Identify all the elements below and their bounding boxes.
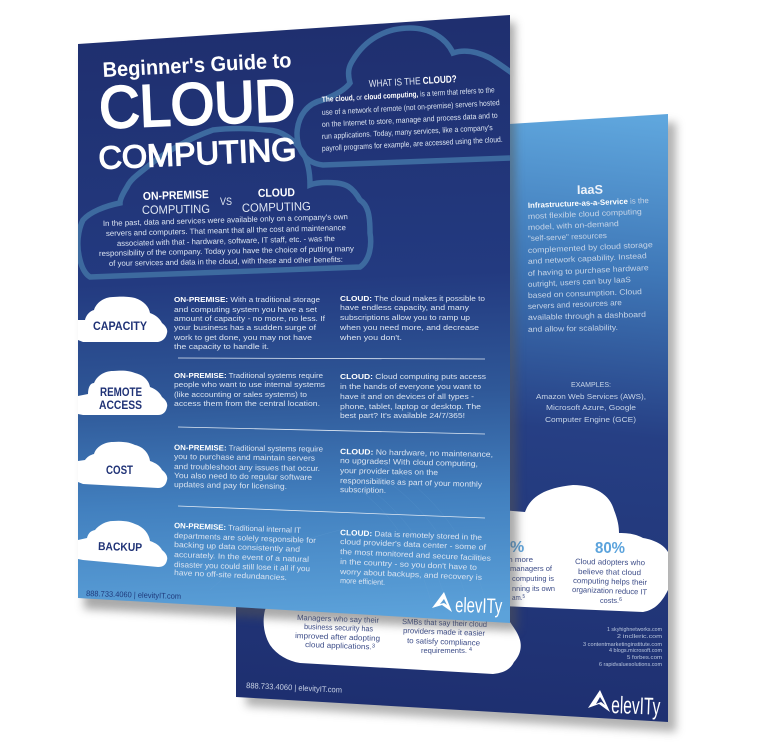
- row: remote access: [78, 371, 486, 420]
- text block: cloud definition: payroll programs for example, are accessed using the cloud.: [322, 135, 503, 153]
- on-premise text: backup: departments are solely responsible for: [174, 531, 317, 545]
- cloud text: backup: more efficient.: [340, 576, 385, 587]
- text block: examples: Microsoft Azure, Google: [546, 403, 636, 412]
- stat text: partly hidden caption: am.: [512, 593, 525, 602]
- cloud text: capacity: have endless capacity, and many: [340, 303, 469, 312]
- cloud text: backup: worry about backups, and recovery is: [339, 567, 482, 582]
- cloud text: remote access: phone, tablet, laptop or desktop. The: [340, 402, 481, 411]
- on-premise text: capacity: and computing system you have a set: [174, 305, 318, 314]
- text block: sources: 2 inclleric.com: [617, 634, 663, 640]
- title line: COMPUTING: COMPUTING: [98, 131, 297, 176]
- logo: back: elevITy: [611, 692, 661, 721]
- on-premise text: backup: have no off-site redundancies.: [174, 568, 287, 582]
- cloud text: remote access: [340, 372, 486, 420]
- stat text: compliance caption: providers made it easier: [403, 626, 486, 638]
- cloud label: backup: [78, 521, 167, 567]
- stat text: partly hidden caption: %: [510, 539, 524, 556]
- heading: on-premise vs cloud: COMPUTING: [242, 199, 311, 215]
- cloud text: capacity: [339, 294, 485, 342]
- cloud label: backup: BACKUP: [98, 541, 143, 554]
- cloud text: cost: no upgrades! With cloud computing,: [340, 456, 478, 468]
- on-premise text: capacity: ON-PREMISE: With a traditional storage: [174, 295, 320, 304]
- footer: back contact: 888.733.4060 | elevityIT.com: [246, 681, 343, 695]
- on-premise text: remote access: [174, 371, 325, 408]
- on-premise text: cost: and troubleshoot any issues that occur.: [174, 462, 320, 473]
- stat text: partly hidden caption: nning its own: [512, 584, 555, 593]
- stat text: partly hidden caption: [506, 539, 555, 602]
- text block: intro: associated with that - hardware, software, IT staff, etc. - was the: [117, 234, 335, 248]
- row: backup: [78, 521, 491, 587]
- heading: on-premise vs cloud: CLOUD: [258, 187, 295, 200]
- stat: 80%: 80%: [595, 540, 625, 557]
- cloud text: capacity: CLOUD: The cloud makes it possible to: [340, 294, 485, 303]
- cloud label: cost: [78, 442, 167, 488]
- stat text: 80% caption: computing helps their: [573, 576, 648, 587]
- on-premise text: capacity: work to get done, you may not have: [173, 333, 312, 342]
- cloud text: backup: in the country - so you don't have to: [340, 557, 477, 572]
- on-premise text: capacity: [173, 295, 326, 351]
- on-premise text: cost: ON-PREMISE: Traditional systems require: [174, 443, 323, 454]
- on-premise text: capacity: the capacity to handle it.: [174, 342, 269, 351]
- cloud text: capacity: when you need more, and decrease: [339, 323, 479, 332]
- on-premise text: backup: [174, 521, 317, 582]
- text block: IaaS description: available through a dashboard: [528, 310, 646, 322]
- text block: sources: 6 rapidvaluesolutions.com: [599, 662, 662, 668]
- stat text: security caption: [295, 613, 380, 651]
- text block: IaaS description: model, with on-demand: [528, 219, 619, 232]
- text block: IaaS description: Infrastructure-as-a-Service is the: [528, 196, 649, 210]
- on-premise text: backup: disaster you could still lose it all if you: [174, 560, 310, 573]
- stat text: partly hidden caption: managers of: [510, 564, 553, 573]
- on-premise text: capacity: your business has a sudden surge of: [174, 323, 317, 332]
- logo: front: elevITy: [455, 594, 503, 618]
- text block: cloud definition: run applications. Today, many services, like a company's: [322, 123, 493, 141]
- text block: IaaS description: and network capability. Instead: [528, 251, 647, 266]
- text block: intro: [99, 212, 354, 268]
- text block: IaaS description: and allow for scalability.: [528, 323, 618, 334]
- text block: intro: servers and computers. That meant that all the cost and maintenance: [106, 223, 346, 238]
- on-premise text: capacity: amount of capacity - no more, no less. If: [174, 314, 326, 323]
- stat text: compliance caption: 4: [469, 647, 472, 653]
- on-premise text: cost: You also need to do regular software: [174, 471, 312, 482]
- cloud text: remote access: best part? It's available 24/7/365!: [340, 411, 465, 420]
- panel: front sheet: [78, 15, 512, 623]
- text block: sources: [583, 627, 663, 668]
- on-premise text: cost: you to purchase and maintain servers: [174, 452, 315, 463]
- cloud outline: on-premise vs cloud: [78, 128, 371, 277]
- stat text: 80% caption: organization reduce IT: [572, 585, 647, 597]
- text block: IaaS description: outright, users can buy IaaS: [528, 275, 631, 289]
- stat text: partly hidden caption: computing is: [512, 574, 554, 583]
- logo: back: [588, 690, 661, 721]
- cloud label: cost: COST: [106, 465, 133, 477]
- text block: examples: EXAMPLES:: [571, 380, 611, 389]
- cloud text: cost: your provider takes on the: [340, 466, 438, 477]
- cloud label: remote access: [78, 371, 167, 415]
- on-premise text: remote access: people who want to use internal systems: [174, 380, 325, 389]
- text block: intro: of your services and data in the cloud, with these and other benefits:: [109, 255, 343, 268]
- text block: sources: 4 blogs.microsoft.com: [609, 648, 662, 654]
- text block: sources: 3 contentmarketinginstitute.com: [583, 642, 662, 648]
- stat text: security caption: Managers who say their: [297, 613, 380, 625]
- on-premise text: backup: ON-PREMISE: Traditional internal IT: [174, 521, 301, 535]
- heading: what is the cloud: WHAT IS THE CLOUD?: [369, 74, 457, 90]
- cloud label: capacity: CAPACITY: [93, 321, 147, 333]
- heading: on-premise vs cloud: VS: [220, 196, 232, 208]
- heading: on-premise vs cloud: [142, 187, 311, 217]
- footer: front contact: 888.733.4060 | elevityIT.com: [86, 589, 181, 601]
- text block: IaaS description: [528, 196, 653, 334]
- stat text: partly hidden caption: th more: [506, 555, 533, 564]
- cloud text: capacity: when you don't.: [339, 333, 402, 342]
- cloud text: cost: CLOUD: No hardware, no maintenance,: [340, 447, 493, 459]
- title line: Beginner's Guide to: Beginner's Guide to: [102, 49, 292, 82]
- stat text: compliance caption: [402, 617, 487, 655]
- text block: IaaS description: most flexible cloud computing: [528, 207, 642, 221]
- cloud text: remote access: have it and on devices of all types -: [340, 392, 474, 401]
- heading: on-premise vs cloud: COMPUTING: [142, 202, 210, 217]
- text block: intro: responsibility of the company. Today you have the choice of putting many: [99, 244, 354, 258]
- stat text: compliance caption: to satisfy compliance: [407, 636, 480, 648]
- cloud label: capacity: [78, 297, 167, 342]
- title: [98, 49, 297, 176]
- stat text: compliance caption: requirements.: [421, 646, 468, 655]
- panel: back sheet: [236, 114, 668, 722]
- text block: cloud definition: use of a network of remote (not on-premise) servers hosted: [322, 98, 500, 117]
- text block: IaaS description: based on consumption. Cloud: [528, 287, 642, 300]
- stat text: 80% caption: 6: [619, 597, 622, 603]
- on-premise text: backup: backing up data consistently and: [174, 540, 300, 554]
- heading: on-premise vs cloud: ON-PREMISE: [143, 189, 209, 203]
- cloud text: capacity: subscriptions allow you to ramp up: [340, 313, 470, 322]
- on-premise text: cost: [174, 443, 323, 491]
- back sheet shadow: [246, 122, 676, 732]
- cloud text: backup: [339, 528, 491, 587]
- cloud text: remote access: CLOUD: Cloud computing puts access: [340, 372, 486, 381]
- on-premise text: remote access: access them from the central location.: [174, 399, 320, 408]
- text block: examples: [536, 380, 646, 424]
- text block: examples: Amazon Web Services (AWS),: [536, 392, 646, 401]
- on-premise text: remote access: (like accounting or sales systems) to: [174, 390, 307, 399]
- cloud text: remote access: in the hands of everyone you want to: [340, 382, 481, 391]
- text block: sources: 5 forbes.com: [627, 655, 662, 661]
- heading: IaaS: IaaS: [577, 183, 603, 197]
- text block: IaaS description: "self-serve" resources: [528, 231, 607, 243]
- row: cost: [78, 442, 493, 495]
- cloud text: backup: cloud provider's data center - some of: [340, 537, 487, 552]
- text block: examples: Computer Engine (GCE): [545, 415, 636, 424]
- stat text: 80% caption: costs.: [600, 596, 620, 605]
- text block: cloud definition: on the Internet to store, manage and process data and to: [322, 111, 498, 129]
- cloud text: backup: CLOUD: Data is remotely stored in the: [340, 528, 482, 542]
- on-premise text: cost: updates and pay for licensing.: [174, 480, 287, 491]
- cloud label: remote access: REMOTE: [100, 387, 142, 399]
- stat text: 80% caption: believe that cloud: [578, 567, 641, 577]
- stat text: security caption: improved after adopting: [295, 631, 380, 643]
- stat text: security caption: cloud applications.: [305, 640, 368, 651]
- text block: cloud definition: The cloud, or cloud computing, is a term that refers to the: [322, 85, 495, 104]
- on-premise text: remote access: ON-PREMISE: Traditional systems require: [174, 371, 323, 380]
- cloud outline: what is the cloud: [297, 28, 512, 165]
- title line: CLOUD: CLOUD: [98, 67, 296, 141]
- text block: cloud definition: [322, 85, 503, 153]
- cloud text: cost: subscription.: [340, 485, 386, 495]
- row: capacity: [78, 294, 485, 351]
- text block: intro: In the past, data and services were available only on a company's own: [103, 212, 348, 228]
- stat text: security caption: business security has: [304, 622, 373, 633]
- stat text: compliance caption: SMBs that say their cloud: [402, 617, 487, 629]
- cloud text: backup: the most monitored and secure facilities: [340, 547, 491, 563]
- stat cloud: right: [500, 485, 668, 612]
- cloud text: cost: [340, 447, 493, 495]
- front sheet shadow: [84, 22, 518, 631]
- stat text: 80% caption: [572, 557, 648, 605]
- cloud label: remote access: ACCESS: [99, 400, 142, 412]
- logo: front: [432, 592, 503, 618]
- stat cloud: left: [264, 600, 521, 674]
- cloud text: cost: responsibilities as part of your monthly: [340, 476, 482, 489]
- text block: IaaS description: complemented by cloud storage: [528, 240, 653, 255]
- text block: sources: 1 skyhighnetworks.com: [607, 627, 662, 633]
- stat text: partly hidden caption: 5: [522, 594, 525, 600]
- text block: IaaS description: of having to purchase hardware: [528, 263, 649, 278]
- stat text: security caption: 3: [372, 643, 375, 649]
- on-premise text: backup: accurately. In the event of a natural: [174, 550, 309, 564]
- stat text: 80% caption: Cloud adopters who: [575, 557, 645, 567]
- text block: IaaS description: servers and resources are: [528, 298, 622, 311]
